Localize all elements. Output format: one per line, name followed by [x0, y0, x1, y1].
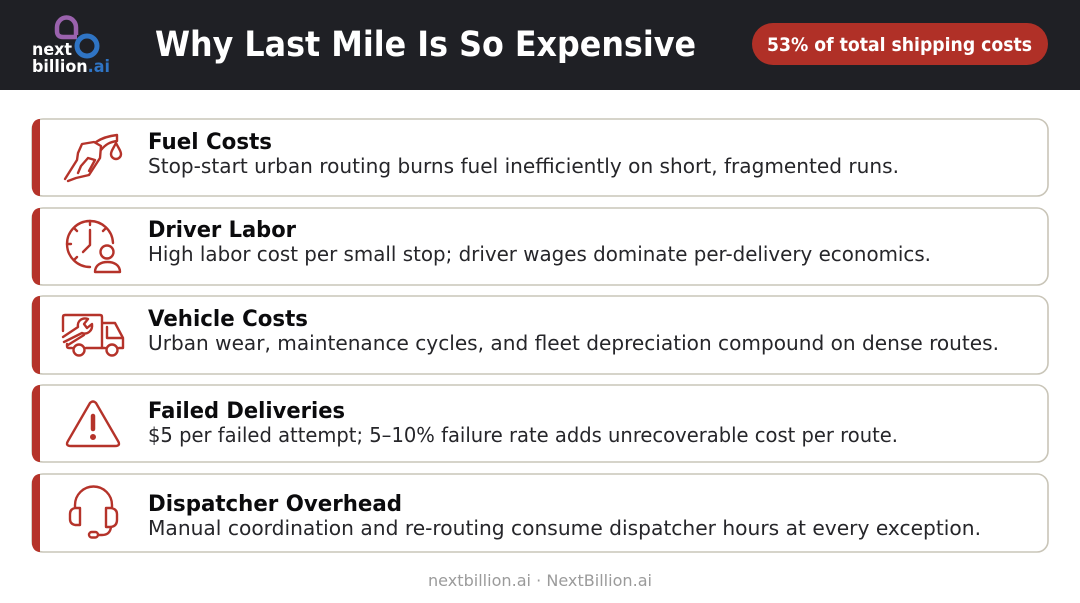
description: failed deliveries: $5 per failed attempt; 5–10% failure rate adds unrecoverable cost per route.	[148, 423, 898, 447]
heading: failed deliveries: Failed Deliveries	[148, 399, 345, 424]
icon: warning triangle	[67, 402, 119, 446]
logo: billion.ai	[32, 57, 110, 77]
description: vehicle costs: Urban wear, maintenance cycles, and fleet depreciation compound on dense routes.	[148, 331, 999, 355]
card: vehicle costs	[32, 296, 1048, 374]
card: dispatcher overhead	[32, 474, 1048, 552]
icon: clock with person	[67, 221, 120, 272]
header band	[0, 0, 1080, 90]
footer: nextbillion.ai · NextBillion.ai	[428, 571, 652, 590]
description: dispatcher overhead: Manual coordination and re-routing consume dispatcher hours at every exception.	[148, 516, 981, 540]
heading: dispatcher overhead: Dispatcher Overhead	[148, 492, 402, 517]
icon: fuel nozzle	[65, 135, 121, 181]
heading: fuel costs: Fuel Costs	[148, 130, 272, 155]
card: driver labor	[32, 208, 1048, 285]
icon: headset	[70, 487, 117, 538]
logo: next	[32, 40, 72, 60]
description: fuel costs: Stop-start urban routing burns fuel inefficiently on short, fragmented runs.	[148, 154, 899, 178]
title: Why Last Mile Is So Expensive	[155, 25, 696, 65]
description: driver labor: High labor cost per small stop; driver wages dominate per-delivery economics.	[148, 242, 931, 266]
badge: 53% of total shipping costs	[752, 23, 1048, 65]
card: failed deliveries	[32, 385, 1048, 462]
logo	[32, 18, 110, 77]
heading: vehicle costs: Vehicle Costs	[148, 307, 308, 332]
badge: 53% of total shipping costs: 53% of total shipping costs	[767, 34, 1032, 56]
heading: driver labor: Driver Labor	[148, 218, 296, 243]
icon: truck with wrench	[63, 315, 123, 356]
card: fuel costs	[32, 119, 1048, 196]
